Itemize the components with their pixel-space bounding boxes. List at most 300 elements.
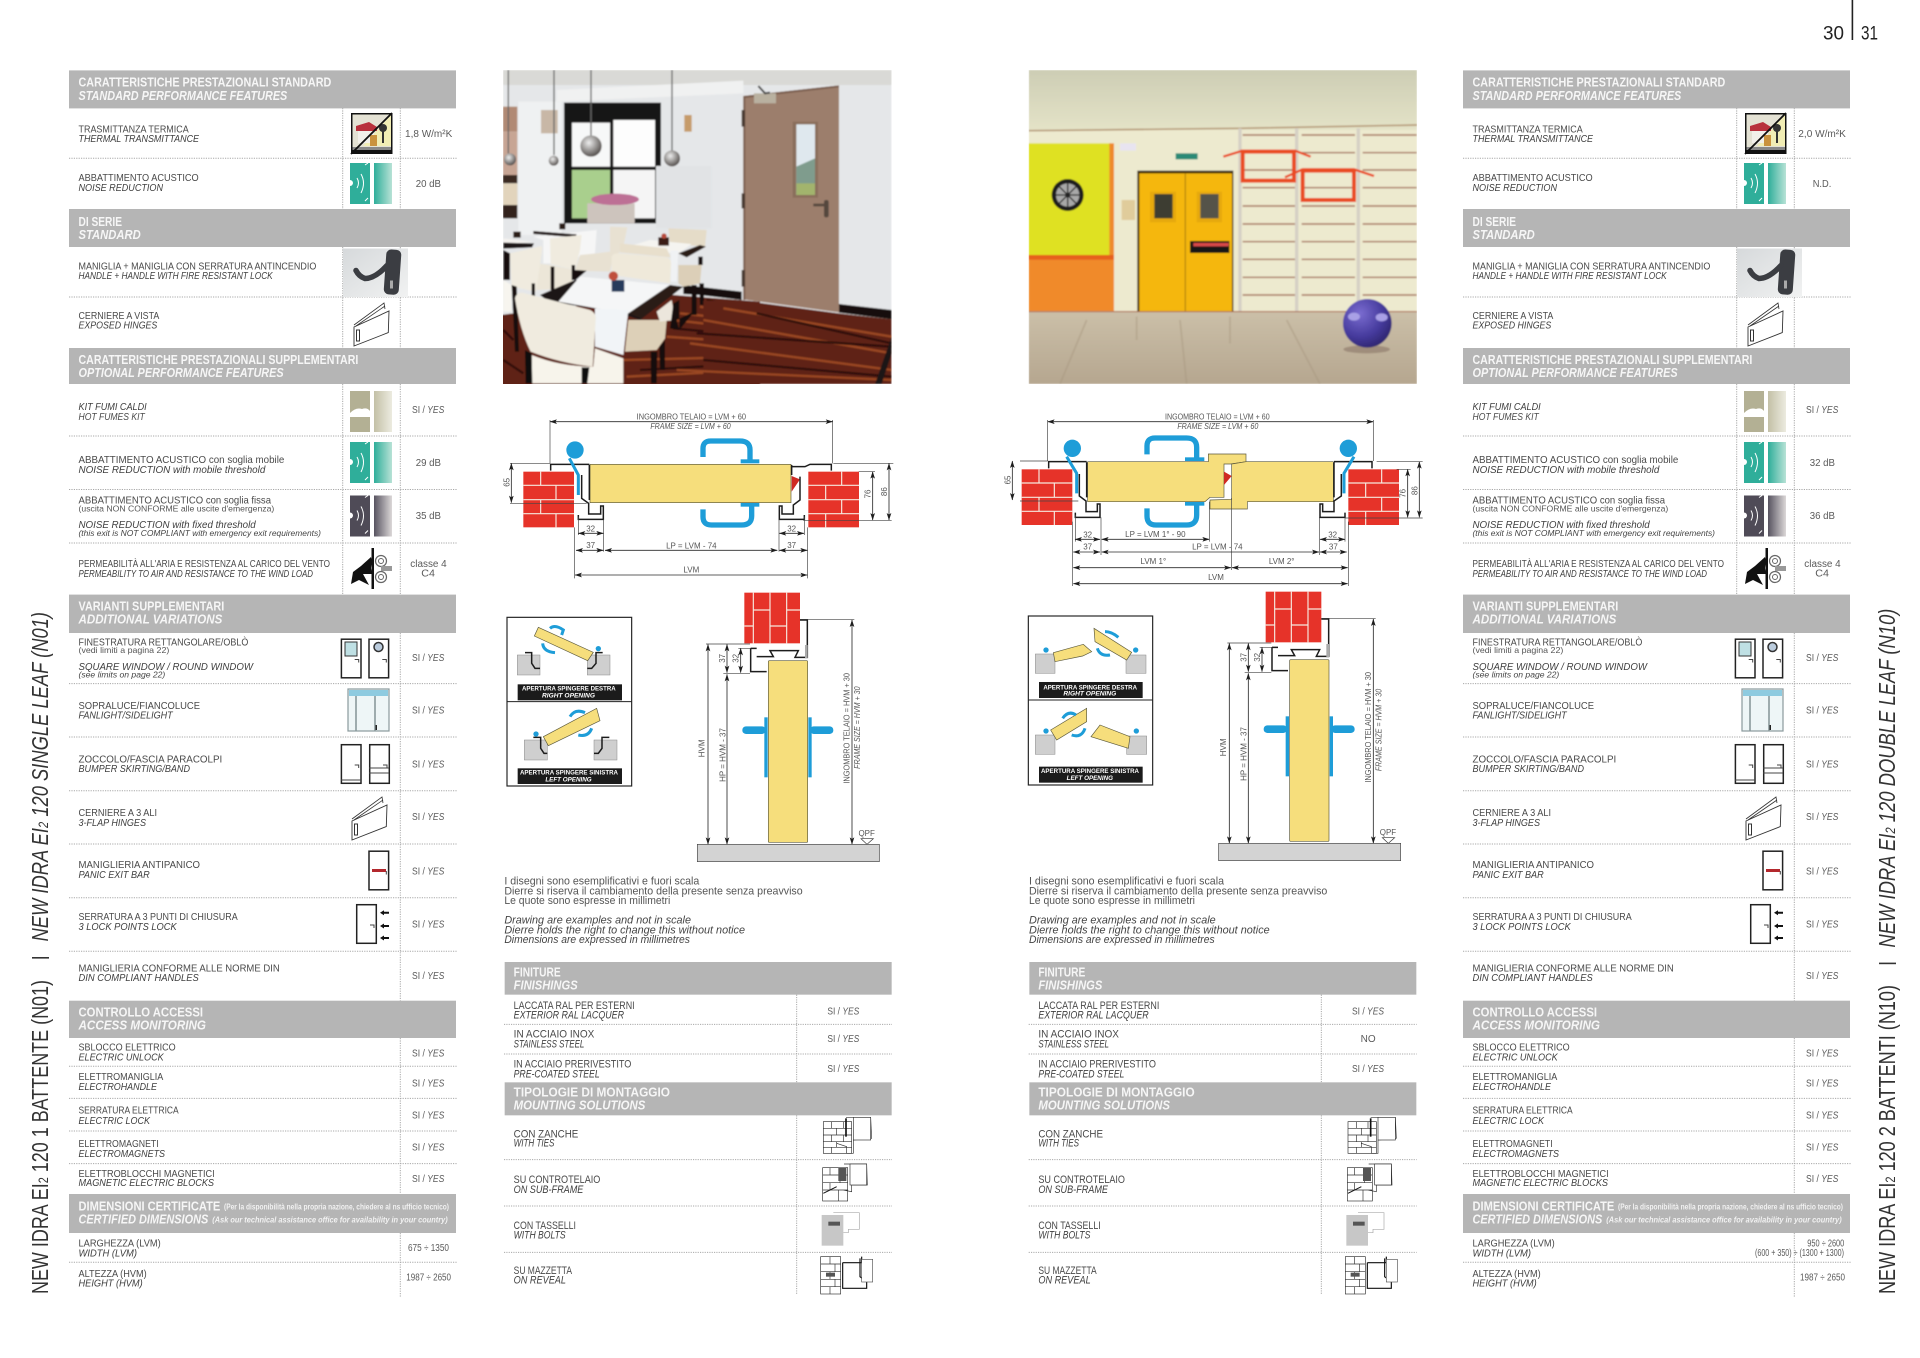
page numbers 30 and 31: 30 bbox=[1823, 22, 1844, 44]
row: height: HEIGHT (HVM) bbox=[78, 1278, 143, 1290]
row: bumper skirting: SI / YES bbox=[412, 760, 445, 770]
row: noise reduction mobile threshold: NOISE REDUCTION with mobile threshold bbox=[78, 464, 266, 476]
heading: access monitoring: CONTROLLO ACCESSI bbox=[1472, 1005, 1597, 1020]
row: stainless steel: STAINLESS STEEL bbox=[514, 1038, 584, 1050]
row: magnetic electric blocks: SI / YES bbox=[1806, 1174, 1839, 1185]
row: noise reduction fixed threshold bbox=[1472, 494, 1835, 538]
vertical section of door: HP = HVM - 37 bbox=[1240, 727, 1249, 781]
disclaimer text: Dierre holds the right to change this without notice bbox=[1029, 924, 1270, 936]
disclaimer text: Dierre si riserva il cambiamento della presente senza preavviso bbox=[1029, 885, 1327, 897]
row: 3-flap hinges: 3-FLAP HINGES bbox=[78, 817, 146, 829]
row: thermal transmittance: 1,8 W/m²K bbox=[405, 129, 453, 140]
vertical title: right page: NEW IDRA EI2 120 DOUBLE LEAF (N10) bbox=[1874, 609, 1900, 948]
row: electromagnets bbox=[1472, 1138, 1839, 1160]
row: with ties: WITH TIES bbox=[514, 1138, 555, 1150]
row: exterior lacquer: SI / YES bbox=[1352, 1006, 1384, 1017]
row: exterior lacquer bbox=[1038, 1000, 1384, 1022]
row: handle: HANDLE + HANDLE WITH FIRE RESISTANT LOCK bbox=[78, 270, 273, 282]
row: bumper skirting bbox=[1472, 745, 1839, 783]
row: exterior lacquer: SI / YES bbox=[827, 1006, 860, 1017]
row: hot fumes kit: KIT FUMI CALDI bbox=[1472, 401, 1541, 413]
row: windows: FINESTRATURA RETTANGOLARE/OBLÒ bbox=[1472, 636, 1642, 648]
plan dimensions: 65 bbox=[502, 477, 511, 487]
row: electric unlock: ELECTRIC UNLOCK bbox=[78, 1051, 165, 1063]
row: bumper skirting: ZOCCOLO/FASCIA PARACOLPI bbox=[1472, 753, 1616, 765]
vertical title: left page: NEW IDRA EI2 120 SINGLE LEAF (N01) bbox=[27, 612, 53, 942]
heading: standard: DI SERIE bbox=[1472, 214, 1516, 229]
row: bumper skirting: ZOCCOLO/FASCIA PARACOLPI bbox=[78, 753, 222, 765]
row: exterior lacquer: EXTERIOR RAL LACQUER bbox=[1038, 1010, 1149, 1022]
row: electromagnets: ELETTROMAGNETI bbox=[1472, 1138, 1553, 1150]
heading: finishings: FINISHINGS bbox=[1038, 977, 1102, 992]
row: thermal transmittance: THERMAL TRANSMITTANCE bbox=[1472, 133, 1594, 145]
row: electric lock: SERRATURA ELETTRICA bbox=[1472, 1104, 1573, 1116]
row: exposed hinges: EXPOSED HINGES bbox=[78, 319, 157, 331]
disclaimer text: Drawing are examples and not in scale bbox=[504, 915, 691, 927]
vertical section of door: 32 bbox=[732, 653, 741, 663]
row: windows: (see limits on page 22) bbox=[78, 670, 165, 680]
plan dimensions bbox=[1003, 412, 1423, 586]
row: electromagnets bbox=[78, 1138, 445, 1160]
row: thermal transmittance: THERMAL TRANSMITTANCE bbox=[78, 133, 200, 145]
row: handle: HANDLE + HANDLE WITH FIRE RESISTANT LOCK bbox=[1472, 270, 1667, 282]
disclaimer text: Le quote sono espresse in millimetri bbox=[1029, 895, 1195, 907]
row: panic exit bar: MANIGLIERIA ANTIPANICO bbox=[78, 859, 200, 871]
row: handle: MANIGLIA + MANIGLIA CON SERRATURA ANTINCENDIO bbox=[1472, 260, 1710, 272]
row: on sub-frame: ON SUB-FRAME bbox=[514, 1184, 584, 1196]
row: windows: (vedi limiti a pagina 22) bbox=[1472, 645, 1563, 655]
opening direction box bbox=[1028, 616, 1153, 785]
heading: certified dimensions bbox=[69, 1194, 456, 1233]
row: noise reduction mobile threshold: ABBATTIMENTO ACUSTICO con soglia mobile bbox=[78, 454, 284, 466]
row: windows: SQUARE WINDOW / ROUND WINDOW bbox=[78, 661, 254, 673]
row: 3-flap hinges: CERNIERE A 3 ALI bbox=[78, 807, 157, 819]
disclaimer text: Dimensions are expressed in millimetres bbox=[1029, 934, 1215, 946]
row: electric unlock bbox=[1472, 1042, 1839, 1063]
heading: mounting solutions bbox=[505, 1082, 892, 1115]
row: windows: (see limits on page 22) bbox=[1472, 670, 1559, 680]
row: air permeability and wind load: classe 4 bbox=[410, 559, 447, 570]
heading: finishings: FINITURE bbox=[514, 964, 561, 979]
row: exposed hinges bbox=[1472, 303, 1783, 346]
plan section of double leaf door bbox=[1022, 438, 1399, 525]
opening direction box: RIGHT OPENING bbox=[1063, 691, 1116, 698]
row: electric unlock bbox=[78, 1042, 445, 1063]
plan dimensions: LP = LVM 1° - 90 bbox=[1125, 530, 1186, 539]
row: with ties bbox=[1038, 1117, 1396, 1153]
row: exposed hinges: CERNIERE A VISTA bbox=[1472, 310, 1553, 322]
row: with bolts: WITH BOLTS bbox=[1038, 1230, 1091, 1242]
heading: optional performance features: CARATTERISTICHE PRESTAZIONALI SUPPLEMENTARI bbox=[1472, 352, 1752, 367]
row: width: LARGHEZZA (LVM) bbox=[1472, 1238, 1555, 1250]
heading: finishings: FINITURE bbox=[1038, 964, 1085, 979]
row: on reveal bbox=[1038, 1257, 1397, 1294]
row: panic exit bar: SI / YES bbox=[412, 866, 445, 878]
row: exposed hinges: CERNIERE A VISTA bbox=[78, 310, 159, 322]
row: magnetic electric blocks: SI / YES bbox=[412, 1174, 445, 1185]
row: noise reduction fixed threshold: ABBATTIMENTO ACUSTICO con soglia fissa bbox=[78, 494, 271, 506]
heading: optional performance features: OPTIONAL PERFORMANCE FEATURES bbox=[1472, 365, 1678, 380]
row: windows: SI / YES bbox=[412, 653, 445, 664]
row: on reveal: SU MAZZETTA bbox=[514, 1265, 573, 1277]
row: noise reduction mobile threshold: NOISE REDUCTION with mobile threshold bbox=[1472, 464, 1660, 476]
row: electrohandle: ELETTROMANIGLIA bbox=[1472, 1071, 1557, 1083]
row: width: LARGHEZZA (LVM) bbox=[78, 1238, 161, 1250]
row: stainless steel bbox=[1038, 1029, 1376, 1050]
row: on sub-frame bbox=[1038, 1164, 1392, 1201]
row: air permeability and wind load: PERMEABILITÀ ALL'ARIA E RESISTENZA AL CARICO DEL VENTO bbox=[1472, 557, 1724, 570]
vertical section of door: 37 bbox=[1239, 652, 1248, 662]
plan dimensions: 37 bbox=[586, 541, 596, 550]
row: DIN handles: SI / YES bbox=[1806, 971, 1839, 982]
row: fanlight: SI / YES bbox=[412, 706, 445, 716]
heading: standard performance features: CARATTERISTICHE PRESTAZIONALI STANDARD bbox=[78, 75, 331, 90]
row: fanlight: SOPRALUCE/FIANCOLUCE bbox=[1472, 700, 1594, 712]
row: width: 675 ÷ 1350 bbox=[408, 1243, 449, 1254]
row: DIN handles bbox=[78, 962, 445, 984]
plan dimensions: LVM bbox=[683, 566, 699, 575]
row: 3-flap hinges: 3-FLAP HINGES bbox=[1472, 817, 1540, 829]
row: air permeability and wind load bbox=[78, 548, 447, 589]
disclaimer text bbox=[1029, 876, 1327, 946]
row: fanlight: SI / YES bbox=[1806, 706, 1839, 716]
vertical title: left page: NEW IDRA EI2 120 1 BATTENTE (N01) bbox=[27, 980, 53, 1294]
heading: access monitoring: ACCESS MONITORING bbox=[78, 1018, 206, 1033]
row: noise reduction: 20 dB bbox=[416, 179, 441, 190]
heading: additional variations: ADDITIONAL VARIATIONS bbox=[78, 612, 223, 627]
plan dimensions: LVM bbox=[1208, 573, 1224, 582]
row: panic exit bar bbox=[78, 851, 445, 890]
vertical section of door: 37 bbox=[718, 653, 727, 663]
row: magnetic electric blocks bbox=[78, 1168, 445, 1189]
row: air permeability and wind load: PERMEABILITÀ ALL'ARIA E RESISTENZA AL CARICO DEL VENTO bbox=[78, 557, 330, 570]
plan section of single leaf door bbox=[523, 441, 859, 527]
row: thermal transmittance: TRASMITTANZA TERMICA bbox=[78, 123, 189, 135]
row: noise reduction bbox=[1472, 163, 1831, 204]
row: panic exit bar: MANIGLIERIA ANTIPANICO bbox=[1472, 859, 1594, 871]
row: windows bbox=[78, 636, 445, 680]
plan dimensions: 76 bbox=[863, 489, 872, 498]
row: fanlight bbox=[78, 689, 445, 731]
row: 3 lock points: 3 LOCK POINTS LOCK bbox=[78, 921, 178, 933]
row: noise reduction fixed threshold: NOISE REDUCTION with fixed threshold bbox=[1472, 519, 1651, 531]
heading: access monitoring bbox=[1463, 1001, 1850, 1038]
row: thermal transmittance: TRASMITTANZA TERMICA bbox=[1472, 123, 1583, 135]
row: electromagnets: ELECTROMAGNETS bbox=[1472, 1148, 1559, 1160]
row: electric lock: SI / YES bbox=[1806, 1110, 1839, 1122]
row: hot fumes kit: SI / YES bbox=[412, 405, 445, 416]
row: height: HEIGHT (HVM) bbox=[1472, 1278, 1537, 1290]
row: width: 950 ÷ 2600 bbox=[1807, 1238, 1845, 1249]
panel: right features table bbox=[1463, 70, 1851, 1297]
row: electric lock: ELECTRIC LOCK bbox=[1472, 1115, 1545, 1127]
disclaimer text bbox=[504, 876, 803, 946]
plan dimensions: FRAME SIZE = LVM + 60 bbox=[1177, 422, 1259, 431]
heading: standard: STANDARD bbox=[1472, 227, 1535, 242]
row: air permeability and wind load: PERMEABILITY TO AIR AND RESISTANCE TO THE WIND LOAD bbox=[78, 568, 313, 580]
vertical section of door: FRAME SIZE = HVM + 30 bbox=[1374, 688, 1383, 771]
plan dimensions: 32 bbox=[586, 524, 596, 533]
row: fanlight bbox=[1472, 689, 1839, 731]
heading: mounting solutions: MOUNTING SOLUTIONS bbox=[514, 1098, 645, 1113]
disclaimer text: Dimensions are expressed in millimetres bbox=[504, 934, 690, 946]
row: electric lock: SERRATURA ELETTRICA bbox=[78, 1104, 179, 1116]
row: pre-coated steel: PRE-COATED STEEL bbox=[1038, 1069, 1124, 1081]
row: electric unlock: SI / YES bbox=[412, 1048, 445, 1059]
heading: additional variations: VARIANTI SUPPLEMENTARI bbox=[1472, 599, 1618, 614]
plan dimensions: 65 bbox=[1003, 475, 1012, 484]
row: width bbox=[78, 1238, 449, 1259]
row: electric unlock: SBLOCCO ELETTRICO bbox=[1472, 1042, 1570, 1054]
row: height: 1987 ÷ 2650 bbox=[1800, 1272, 1845, 1284]
panel: notes and finishes, left page bbox=[504, 876, 892, 1295]
row: windows: FINESTRATURA RETTANGOLARE/OBLÒ bbox=[78, 636, 248, 648]
disclaimer text: Drawing are examples and not in scale bbox=[1029, 915, 1216, 927]
row: electric lock: ELECTRIC LOCK bbox=[78, 1115, 151, 1127]
row: with ties: CON ZANCHE bbox=[1038, 1128, 1103, 1140]
disclaimer text: Dierre holds the right to change this without notice bbox=[504, 924, 745, 936]
row: pre-coated steel bbox=[514, 1058, 860, 1081]
heading: finishings: FINISHINGS bbox=[514, 977, 578, 992]
row: electric lock bbox=[78, 1104, 445, 1127]
row: electrohandle: SI / YES bbox=[1806, 1078, 1839, 1090]
disclaimer text: Le quote sono espresse in millimetri bbox=[504, 895, 670, 907]
opening direction box: LEFT OPENING bbox=[1067, 775, 1113, 782]
heading: certified dimensions: DIMENSIONI CERTIFICATE bbox=[78, 1199, 221, 1214]
plan dimensions: FRAME SIZE = LVM + 60 bbox=[650, 422, 731, 431]
row: 3-flap hinges: SI / YES bbox=[412, 812, 445, 823]
row: noise reduction fixed threshold: NOISE REDUCTION with fixed threshold bbox=[78, 519, 257, 531]
row: DIN handles: DIN COMPLIANT HANDLES bbox=[1472, 972, 1593, 984]
plan dimensions: INGOMBRO TELAIO = LVM + 60 bbox=[1165, 412, 1270, 421]
heading: optional performance features bbox=[1463, 348, 1850, 384]
vertical section of door: FRAME SIZE = HVM + 30 bbox=[853, 686, 862, 769]
heading: finishings bbox=[1029, 962, 1416, 995]
row: with bolts: WITH BOLTS bbox=[514, 1230, 566, 1242]
plan dimensions bbox=[502, 412, 893, 578]
row: noise reduction mobile threshold: 29 dB bbox=[416, 458, 441, 469]
row: electric lock: SI / YES bbox=[412, 1110, 445, 1122]
opening direction box: APERTURA SPINGERE DESTRA bbox=[1043, 684, 1137, 691]
row: on reveal: SU MAZZETTA bbox=[1038, 1265, 1097, 1277]
opening direction box: APERTURA SPINGERE SINISTRA bbox=[520, 769, 618, 776]
heading: optional performance features: OPTIONAL PERFORMANCE FEATURES bbox=[78, 365, 284, 380]
vertical section of door: QPF bbox=[1380, 828, 1396, 837]
row: electromagnets: SI / YES bbox=[1806, 1142, 1839, 1154]
row: windows: SQUARE WINDOW / ROUND WINDOW bbox=[1472, 661, 1648, 673]
row: noise reduction: ABBATTIMENTO ACUSTICO bbox=[1472, 172, 1593, 184]
heading: standard performance features: CARATTERISTICHE PRESTAZIONALI STANDARD bbox=[1472, 75, 1725, 90]
vertical section of door: HVM bbox=[1219, 738, 1228, 756]
technical drawings: double leaf bbox=[1003, 412, 1423, 861]
row: 3 lock points bbox=[78, 905, 445, 943]
row: electrohandle: SI / YES bbox=[412, 1078, 445, 1090]
row: fanlight: FANLIGHT/SIDELIGHT bbox=[1472, 710, 1568, 722]
row: height: 1987 ÷ 2650 bbox=[406, 1272, 451, 1284]
heading: certified dimensions: CERTIFIED DIMENSIONS bbox=[78, 1212, 209, 1227]
heading: standard performance features: STANDARD PERFORMANCE FEATURES bbox=[1472, 88, 1682, 103]
row: 3-flap hinges: CERNIERE A 3 ALI bbox=[1472, 807, 1551, 819]
row: stainless steel bbox=[514, 1029, 860, 1050]
photo: gym with yellow double fire door bbox=[1029, 70, 1417, 384]
row: thermal transmittance bbox=[78, 113, 453, 154]
row: height: ALTEZZA (HVM) bbox=[78, 1268, 147, 1280]
row: stainless steel: SI / YES bbox=[827, 1034, 860, 1045]
row: noise reduction: N.D. bbox=[1813, 179, 1831, 190]
heading: additional variations: ADDITIONAL VARIATIONS bbox=[1472, 612, 1617, 627]
plan dimensions: 37 bbox=[1329, 542, 1338, 551]
vertical section of door: INGOMBRO TELAIO = HVM + 30 bbox=[843, 672, 852, 784]
row: noise reduction fixed threshold: (this exit is NOT COMPLIANT with emergency exit requirements) bbox=[1472, 528, 1715, 538]
row: magnetic electric blocks: ELETTROBLOCCHI MAGNETICI bbox=[1472, 1168, 1609, 1180]
row: noise reduction: NOISE REDUCTION bbox=[1472, 182, 1557, 194]
row: on sub-frame: SU CONTROTELAIO bbox=[514, 1174, 601, 1186]
row: panic exit bar: SI / YES bbox=[1806, 866, 1839, 878]
row: fanlight: FANLIGHT/SIDELIGHT bbox=[78, 710, 174, 722]
row: hot fumes kit bbox=[78, 391, 445, 432]
heading: access monitoring: CONTROLLO ACCESSI bbox=[78, 1005, 203, 1020]
row: height: ALTEZZA (HVM) bbox=[1472, 1268, 1541, 1280]
panel: notes and finishes, right page bbox=[1029, 876, 1417, 1295]
row: magnetic electric blocks bbox=[1472, 1168, 1839, 1189]
row: windows bbox=[1472, 636, 1839, 680]
row: electromagnets: ELECTROMAGNETS bbox=[78, 1148, 165, 1160]
heading: standard: STANDARD bbox=[78, 227, 141, 242]
opening direction box: RIGHT OPENING bbox=[542, 693, 595, 700]
plan dimensions: 32 bbox=[1328, 530, 1338, 539]
row: panic exit bar: PANIC EXIT BAR bbox=[1472, 869, 1544, 881]
row: on sub-frame: SU CONTROTELAIO bbox=[1038, 1174, 1125, 1186]
row: panic exit bar bbox=[1472, 851, 1839, 890]
row: width: WIDTH (LVM) bbox=[1472, 1247, 1531, 1259]
row: magnetic electric blocks: MAGNETIC ELECTRIC BLOCKS bbox=[1472, 1177, 1608, 1189]
row: noise reduction mobile threshold bbox=[78, 442, 441, 483]
plan dimensions: 37 bbox=[1083, 542, 1093, 551]
row: exposed hinges bbox=[78, 303, 389, 346]
vertical section of door: INGOMBRO TELAIO = HVM + 30 bbox=[1364, 671, 1373, 783]
vertical section of door bbox=[1219, 592, 1401, 861]
photo: restaurant with brown fire door bbox=[500, 70, 892, 387]
vertical section of door: 32 bbox=[1253, 652, 1262, 662]
row: bumper skirting: SI / YES bbox=[1806, 760, 1839, 770]
row: electric unlock: SI / YES bbox=[1806, 1048, 1839, 1059]
row: 3 lock points: SERRATURA A 3 PUNTI DI CHIUSURA bbox=[78, 911, 238, 923]
vertical section of door bbox=[697, 593, 879, 862]
row: on reveal bbox=[514, 1257, 873, 1294]
row: handle: MANIGLIA + MANIGLIA CON SERRATURA ANTINCENDIO bbox=[78, 260, 316, 272]
row: height bbox=[1472, 1268, 1845, 1290]
row: on reveal: ON REVEAL bbox=[514, 1274, 566, 1286]
row: noise reduction fixed threshold bbox=[78, 494, 441, 538]
row: noise reduction fixed threshold: (this exit is NOT COMPLIANT with emergency exit requirements) bbox=[78, 528, 321, 538]
row: with ties: CON ZANCHE bbox=[514, 1128, 578, 1140]
row: with ties: WITH TIES bbox=[1038, 1138, 1079, 1150]
row: thermal transmittance: 2,0 W/m²K bbox=[1798, 129, 1846, 140]
row: electrohandle bbox=[1472, 1071, 1839, 1093]
row: exterior lacquer: LACCATA RAL PER ESTERNI bbox=[514, 1000, 635, 1012]
row: 3 lock points: SI / YES bbox=[412, 920, 445, 930]
heading: standard: DI SERIE bbox=[78, 214, 122, 229]
row: electric unlock: ELECTRIC UNLOCK bbox=[1472, 1051, 1559, 1063]
row: electromagnets: SI / YES bbox=[412, 1142, 445, 1154]
row: air permeability and wind load bbox=[1472, 548, 1841, 589]
row: DIN handles: SI / YES bbox=[412, 971, 445, 982]
row: stainless steel: IN ACCIAIO INOX bbox=[1038, 1029, 1120, 1041]
heading: mounting solutions: TIPOLOGIE DI MONTAGGIO bbox=[514, 1084, 670, 1099]
row: exterior lacquer: EXTERIOR RAL LACQUER bbox=[514, 1010, 624, 1022]
opening direction box: APERTURA SPINGERE DESTRA bbox=[522, 686, 616, 693]
row: stainless steel: IN ACCIAIO INOX bbox=[514, 1029, 595, 1041]
row: noise reduction fixed threshold: ABBATTIMENTO ACUSTICO con soglia fissa bbox=[1472, 494, 1665, 506]
row: windows: SI / YES bbox=[1806, 653, 1839, 664]
plan dimensions: 76 bbox=[1399, 488, 1408, 498]
row: air permeability and wind load: C4 bbox=[1815, 568, 1829, 580]
row: air permeability and wind load: PERMEABILITY TO AIR AND RESISTANCE TO THE WIND LOAD bbox=[1472, 568, 1707, 580]
row: air permeability and wind load: C4 bbox=[421, 568, 435, 580]
heading: finishings bbox=[505, 962, 892, 995]
row: electrohandle: ELETTROMANIGLIA bbox=[78, 1071, 163, 1083]
vertical title: right page bbox=[1874, 609, 1900, 1294]
heading: optional performance features: CARATTERISTICHE PRESTAZIONALI SUPPLEMENTARI bbox=[78, 352, 358, 367]
heading: standard performance features: STANDARD PERFORMANCE FEATURES bbox=[78, 88, 288, 103]
row: with bolts bbox=[1038, 1213, 1384, 1246]
row: exterior lacquer bbox=[514, 1000, 860, 1022]
row: with ties bbox=[514, 1117, 872, 1153]
row: handle bbox=[1472, 248, 1802, 297]
row: 3 lock points: SERRATURA A 3 PUNTI DI CHIUSURA bbox=[1472, 911, 1632, 923]
row: width bbox=[1472, 1238, 1845, 1259]
row: hot fumes kit: HOT FUMES KIT bbox=[78, 411, 146, 423]
row: noise reduction: ABBATTIMENTO ACUSTICO bbox=[78, 172, 199, 184]
technical drawings: single leaf bbox=[502, 412, 893, 862]
vertical section of door: HP = HVM - 37 bbox=[718, 728, 727, 782]
heading: certified dimensions: CERTIFIED DIMENSIONS bbox=[1472, 1212, 1603, 1227]
row: air permeability and wind load: classe 4 bbox=[1804, 559, 1841, 570]
disclaimer text: Dierre si riserva il cambiamento della presente senza preavviso bbox=[504, 885, 803, 897]
disclaimer text: I disegni sono esemplificativi e fuori scala bbox=[504, 876, 700, 888]
row: pre-coated steel: IN ACCIAIO PRERIVESTITO bbox=[1038, 1058, 1156, 1070]
page numbers 30 and 31 bbox=[1823, 0, 1878, 44]
heading: certified dimensions: (Per la disponibilità nella propria nazione, chiedere al ns ufficio tecnico) bbox=[224, 1202, 449, 1212]
plan dimensions: 86 bbox=[1410, 486, 1419, 495]
heading: certified dimensions: (Ask our technical assistance office for availability in your country) bbox=[1606, 1215, 1842, 1225]
heading: certified dimensions: DIMENSIONI CERTIFICATE bbox=[1472, 1199, 1615, 1214]
heading: mounting solutions bbox=[1029, 1082, 1416, 1115]
row: noise reduction mobile threshold: ABBATTIMENTO ACUSTICO con soglia mobile bbox=[1472, 454, 1678, 466]
row: 3-flap hinges bbox=[1472, 797, 1839, 840]
heading: standard bbox=[1463, 209, 1850, 247]
row: magnetic electric blocks: MAGNETIC ELECTRIC BLOCKS bbox=[78, 1177, 214, 1189]
row: noise reduction mobile threshold: 32 dB bbox=[1810, 458, 1835, 469]
row: noise reduction: NOISE REDUCTION bbox=[78, 182, 163, 194]
row: with bolts bbox=[514, 1213, 859, 1246]
vertical title: left page bbox=[27, 612, 53, 1294]
opening direction box bbox=[507, 617, 632, 786]
plan dimensions: INGOMBRO TELAIO = LVM + 60 bbox=[637, 412, 747, 421]
row: electromagnets: ELETTROMAGNETI bbox=[78, 1138, 159, 1150]
heading: additional variations bbox=[1463, 595, 1850, 633]
plan dimensions: 86 bbox=[880, 487, 889, 496]
row: 3-flap hinges bbox=[78, 797, 445, 840]
heading: standard performance features bbox=[1463, 70, 1850, 108]
row: DIN handles: MANIGLIERIA CONFORME ALLE NORME DIN bbox=[78, 962, 280, 974]
plan dimensions: LVM 2° bbox=[1269, 557, 1295, 566]
row: electric unlock: SBLOCCO ELETTRICO bbox=[78, 1042, 176, 1054]
row: pre-coated steel: PRE-COATED STEEL bbox=[514, 1069, 600, 1081]
row: pre-coated steel bbox=[1038, 1058, 1384, 1081]
row: 3 lock points: 3 LOCK POINTS LOCK bbox=[1472, 921, 1572, 933]
heading: access monitoring: ACCESS MONITORING bbox=[1472, 1018, 1600, 1033]
